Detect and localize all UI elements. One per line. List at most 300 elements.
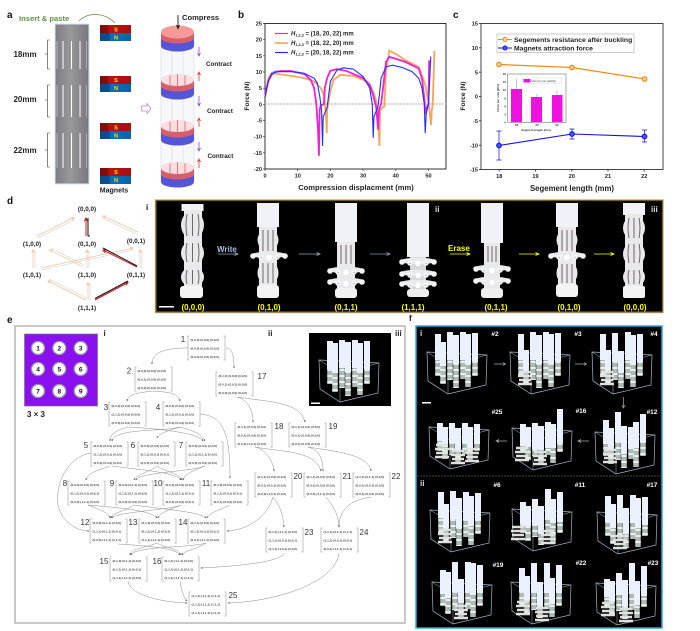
column state 0,0,0 erase xyxy=(623,203,645,298)
matrix 10: (0,0,0) (0,0,0) (0,0,0) xyxy=(166,483,194,487)
3 by 3 purple grid: 9 xyxy=(79,388,83,396)
photo iii tank xyxy=(309,333,391,406)
panel c: segment length chart xyxy=(453,10,663,193)
y axis title: Force (N) xyxy=(244,82,251,110)
sub-labels ii and iii: iii xyxy=(651,205,658,214)
matrix 7: (0,0,0) (0,0,0) (0,0,0) xyxy=(188,444,217,448)
matrix 8: 8 xyxy=(63,479,68,488)
matrix 3: (0,0,0) (0,0,0) (0,0,0) xyxy=(112,404,140,408)
contract arrows and labels xyxy=(198,47,234,168)
inset bar chart: Force per area (kPa) xyxy=(496,84,500,112)
matrix 2: (0,0,0) (0,0,0) (0,0,0) xyxy=(138,369,166,373)
matrix 18: (0,1,1) (0,0,0) (0,0,0) xyxy=(238,425,266,429)
compress label and arrow xyxy=(176,13,219,28)
blue curve xyxy=(265,57,431,146)
sub-labels ii and iii: ii xyxy=(435,205,439,214)
panel a: magnet assembly xyxy=(7,10,234,194)
arrow write step three xyxy=(370,252,390,256)
column state 0,1,0 xyxy=(250,203,288,298)
matrix 3: (1,1,1) (0,0,0) (0,0,0) xyxy=(112,412,140,416)
tank 19 xyxy=(432,562,504,624)
chart legend xyxy=(275,32,354,57)
matrix 7: (1,1,1) (0,1,1) (0,0,0) xyxy=(188,452,217,456)
matrix 4: 4 xyxy=(156,403,161,412)
matrix 24: (0,0,1) (1,1,1) (1,0,1) xyxy=(324,547,352,551)
matrix 5 xyxy=(84,441,128,466)
tank 16: #16 xyxy=(576,408,587,415)
matrix 16 xyxy=(153,557,199,581)
tank 11 xyxy=(511,482,586,551)
photo frame xyxy=(155,200,664,313)
3 by 3 purple grid xyxy=(24,334,98,406)
matrix 23: (0,1,1) (1,1,1) (0,0,0) xyxy=(268,530,297,534)
x tick labels: 0 xyxy=(263,174,267,180)
3 by 3 purple grid: 6 xyxy=(79,366,83,374)
plot frame and ticks xyxy=(479,24,663,172)
gray return arrows xyxy=(35,218,142,300)
magnets: S xyxy=(114,126,118,132)
matrix 21 xyxy=(304,472,352,497)
y axis title: Force (N) xyxy=(460,82,467,110)
matrix 3: (0,0,0) (0,0,0) (0,0,0) xyxy=(112,421,140,425)
matrix 11: (0,1,1) (0,0,1) (0,0,1) xyxy=(214,492,242,496)
chart legend: 1,2,3 xyxy=(295,53,304,57)
matrix 19 xyxy=(289,422,338,447)
matrix 22: (0,0,1) (0,0,1) (0,0,0) xyxy=(356,484,384,488)
matrix 11: 11 xyxy=(202,479,211,488)
matrix 9: 9 xyxy=(110,479,115,488)
3 by 3 purple grid: 1 xyxy=(36,346,40,352)
matrix 15 xyxy=(100,557,147,581)
matrix 22: (0,0,1) (0,0,0) (0,0,0) xyxy=(356,492,384,496)
y tick labels: 10 xyxy=(472,46,478,52)
panel label a: a xyxy=(7,10,13,21)
matrix 13: 13 xyxy=(129,518,138,527)
matrix 12 xyxy=(81,518,127,543)
sub-labels: i xyxy=(104,329,106,338)
chart legend: = (18, 22, 20) mm xyxy=(304,41,354,47)
matrix 18: 18 xyxy=(275,422,284,431)
y tick labels: 10 xyxy=(256,70,262,76)
tank 22: #22 xyxy=(576,560,587,567)
legend xyxy=(497,34,634,52)
frame xyxy=(416,326,662,628)
x tick labels: 50 xyxy=(425,174,432,180)
matrix 8: (0,0,0) (1,1,1) (0,0,0) xyxy=(70,500,99,504)
tank 2: #2 xyxy=(491,331,499,338)
3 by 3 purple grid: 5 xyxy=(57,366,61,374)
matrix 15: 15 xyxy=(100,557,109,566)
matrix 25: (1,1,1) (1,1,1) (1,1,1) xyxy=(192,602,220,606)
sub-labels ii and iii xyxy=(435,205,658,214)
tank 25: #25 xyxy=(492,409,503,416)
sub-labels: ii xyxy=(420,479,424,488)
matrix 22: 22 xyxy=(392,472,401,481)
sub-label i: i xyxy=(146,203,148,212)
matrix 10: 10 xyxy=(154,479,163,488)
arrow and label write: Write xyxy=(217,245,237,254)
chart legend: = (20, 18, 22) mm xyxy=(304,51,354,57)
matrix 25 xyxy=(189,591,238,616)
matrix 21: (0,0,1) (0,0,0) (0,0,0) xyxy=(306,484,335,488)
matrix 22 xyxy=(353,472,401,497)
matrix 17: (0,0,1) (0,0,1) (0,0,0) xyxy=(218,382,247,386)
panel f: photo sequences of tanks xyxy=(409,314,662,628)
matrix 4: (0,1,1) (0,0,1) (0,0,0) xyxy=(166,412,194,416)
matrix 10: (0,0,0) (0,0,0) (0,0,1) xyxy=(166,500,194,504)
segment length 20mm xyxy=(13,85,50,117)
inset bar chart: Memory bio stability xyxy=(532,79,557,83)
panel label b: b xyxy=(238,10,244,21)
x tick labels: 22 xyxy=(641,174,647,180)
matrix 16: (1,1,1) (1,1,1) (1,1,1) xyxy=(164,576,193,580)
flow arrows xyxy=(494,362,625,442)
matrix 15: (0,1,0) (0,1,1) (0,0,0) xyxy=(112,559,141,563)
matrix 20: (0,1,1) (0,0,0) (0,0,0) xyxy=(258,475,286,479)
y tick labels: -15 xyxy=(254,151,262,157)
matrix 17 xyxy=(216,372,267,396)
matrix 18: (0,0,1) (0,0,0) (0,0,0) xyxy=(238,434,266,438)
state labels: (1,1,0) xyxy=(78,272,96,279)
inset bar chart: 18 xyxy=(503,72,506,76)
matrix 9: (1,1,1) (0,1,1) (0,0,0) xyxy=(118,492,147,496)
matrix 14: 14 xyxy=(179,518,188,527)
legend: Magnets attraction force xyxy=(514,46,593,52)
state labels: (1,0,0) xyxy=(23,241,41,248)
contract arrows and labels: Contract xyxy=(208,153,234,160)
3 by 3 purple grid: 2 xyxy=(57,346,61,352)
matrix 14: (0,0,1) (1,1,1) (0,0,0) xyxy=(190,538,219,542)
matrix 5: (0,0,0) (0,0,0) (0,0,0) xyxy=(94,444,122,448)
matrix 17: (0,1,1) (0,0,0) (0,0,0) xyxy=(218,374,247,378)
y tick labels: -15 xyxy=(470,168,478,174)
state labels: (1,0,1) xyxy=(23,272,41,279)
strip state labels: (0,0,0) xyxy=(181,303,205,312)
x axis title: Segement length (mm) xyxy=(530,184,614,193)
matrix 7: 7 xyxy=(179,441,184,450)
matrix 24: (1,1,1) (0,0,1) (0,0,1) xyxy=(324,538,352,542)
insert and paste note xyxy=(19,14,115,23)
tank 2 xyxy=(427,331,499,394)
matrix 17: (0,0,0) (0,0,0) (0,0,0) xyxy=(218,391,247,395)
matrix 1: 1 xyxy=(181,335,186,344)
matrix 15: (1,1,1) (1,1,1) (0,0,0) xyxy=(112,576,141,580)
segment length 18mm xyxy=(13,40,50,69)
matrix 6: (0,0,0) (0,0,0) (0,0,0) xyxy=(140,444,169,448)
inset bar chart: 22 xyxy=(555,123,559,127)
slotted column xyxy=(55,24,89,184)
legend: Segements resistance after buckling xyxy=(514,37,632,44)
tank 3: #3 xyxy=(574,331,582,338)
matrix 1: (0,0,0) (0,0,0) (0,0,0) xyxy=(190,346,219,350)
segment length 22mm xyxy=(13,133,50,167)
x tick labels: 18 xyxy=(496,174,502,180)
strip state labels: (0,1,1) xyxy=(484,303,508,312)
strip state labels: (1,1,1) xyxy=(401,303,425,312)
matrix 23: 23 xyxy=(305,528,314,537)
panel label e: e xyxy=(7,315,13,326)
y tick labels: 15 xyxy=(472,22,478,28)
matrix 8 xyxy=(63,479,105,505)
compress label and arrow: Compress xyxy=(182,13,219,22)
y tick labels: -20 xyxy=(254,167,262,173)
tank 12: #12 xyxy=(647,409,658,416)
matrix 24: (1,1,1) (0,1,1) (1,1,1) xyxy=(324,530,352,534)
panel label f: f xyxy=(409,314,412,323)
orange curve xyxy=(265,51,434,146)
x tick labels: 30 xyxy=(360,174,366,180)
sub-labels: iii xyxy=(395,329,402,338)
divider between i and ii xyxy=(417,475,661,477)
matrix 7: (0,0,0) (0,0,0) (0,0,0) xyxy=(188,461,217,465)
matrix 15: (0,1,1) (0,1,1) (0,0,1) xyxy=(112,568,141,572)
matrix 21: 21 xyxy=(343,472,352,481)
contract arrows and labels: Contract xyxy=(206,61,233,68)
tank 16 xyxy=(512,408,587,470)
y tick labels: -5 xyxy=(473,119,478,125)
tank 23 xyxy=(596,560,659,625)
magnets: N xyxy=(114,178,118,184)
matrix 7 xyxy=(179,441,223,466)
y tick labels: -10 xyxy=(470,143,478,149)
arrow erase step two xyxy=(519,252,539,256)
plot frame and ticks xyxy=(263,24,446,171)
matrix 12: (0,0,0) (0,1,1) (0,0,0) xyxy=(92,521,121,525)
matrix 25: (1,1,1) (1,1,1) (1,1,1) xyxy=(192,611,220,615)
matrix 13: (0,1,0) (0,0,0) (0,0,0) xyxy=(142,521,170,525)
inset bar chart: 0 xyxy=(504,120,506,124)
chart legend: = (18, 20, 22) mm xyxy=(304,32,354,38)
inset bar chart: 6 xyxy=(504,104,506,108)
matrix 25: 25 xyxy=(229,591,238,600)
highlighted write and erase arrows xyxy=(86,218,137,300)
insert and paste note: Insert & paste xyxy=(19,14,69,23)
matrix 17: 17 xyxy=(258,372,267,381)
tank 3 xyxy=(510,331,582,394)
magenta curve xyxy=(265,57,429,156)
tank 4: #4 xyxy=(650,331,658,338)
inset bar chart: 18 xyxy=(515,123,518,127)
matrix 4: (0,0,0) (0,0,0) (0,0,0) xyxy=(166,404,194,408)
segment length 18mm: 18mm xyxy=(13,50,37,59)
strip state labels: (0,1,1) xyxy=(334,303,358,312)
y tick labels: 0 xyxy=(475,95,478,101)
matrix 12: (1,1,1) (0,1,1) (0,0,1) xyxy=(92,530,121,534)
matrix 9: (0,0,0) (0,1,1) (0,0,0) xyxy=(118,483,147,487)
matrix 20 xyxy=(255,472,303,497)
arrow erase step three xyxy=(594,252,614,256)
x tick labels: 20 xyxy=(569,174,575,180)
tank 17: #17 xyxy=(647,482,658,489)
tank 17 xyxy=(597,482,658,554)
state labels: (1,1,1) xyxy=(78,305,96,312)
tank 23: #23 xyxy=(648,560,659,567)
3 by 3 purple grid: 8 xyxy=(57,388,61,396)
strip state labels: (0,0,0) xyxy=(623,303,647,312)
panel b: force displacement chart xyxy=(238,10,446,192)
sub-labels: i xyxy=(420,329,422,338)
matrix 23: (1,1,1) (1,0,1) (0,0,0) xyxy=(268,547,297,551)
matrix 14: (0,1,1) (0,0,0) (0,0,0) xyxy=(190,521,219,525)
matrix 2: (0,0,1) (0,0,0) (0,0,0) xyxy=(138,378,166,382)
chart legend: 1,2,3 xyxy=(295,43,304,47)
matrix 9 xyxy=(110,479,153,505)
tank 6 xyxy=(430,482,501,552)
y tick labels: -10 xyxy=(254,135,262,141)
matrix 1: (0,0,0) (0,0,0) (0,0,0) xyxy=(190,355,219,359)
x tick labels xyxy=(263,174,432,180)
inset bar chart: 12 xyxy=(503,88,506,92)
column state 0,1,1 erase xyxy=(473,203,511,298)
scale bar xyxy=(159,306,174,308)
chart legend: H xyxy=(291,32,296,38)
segment length 20mm: 20mm xyxy=(13,95,37,104)
matrix 5: 5 xyxy=(84,441,89,450)
magnets xyxy=(100,25,131,184)
y tick labels xyxy=(254,22,262,173)
matrix 21: (0,1,1) (0,0,0) (0,0,0) xyxy=(306,475,335,479)
segment length 22mm: 22mm xyxy=(13,146,37,155)
matrix 1 xyxy=(181,335,225,360)
panel label c: c xyxy=(453,10,459,21)
y tick labels: 5 xyxy=(259,86,262,92)
matrix 2 xyxy=(127,366,172,391)
state labels: (0,1,0) xyxy=(78,241,96,248)
inset bar chart: 15 xyxy=(503,80,506,84)
matrix 10 xyxy=(154,479,200,505)
sub-labels xyxy=(420,329,424,488)
panel d: state graph xyxy=(7,196,145,312)
matrix 6: (0,0,0) (0,0,0) (0,0,0) xyxy=(140,461,169,465)
tank 11: #11 xyxy=(575,482,586,489)
x tick labels: 10 xyxy=(295,174,301,180)
3 by 3 purple grid: 4 xyxy=(36,366,40,374)
matrix 13: (1,1,1) (1,1,1) (0,0,0) xyxy=(142,538,170,542)
matrix 13 xyxy=(129,518,176,543)
matrix 11: (0,1,0) (0,0,0) (0,0,0) xyxy=(214,483,242,487)
matrix 10: (1,1,1) (0,1,1) (0,0,1) xyxy=(166,492,194,496)
matrix 4: (0,0,0) (0,0,0) (0,0,0) xyxy=(166,421,194,425)
transition arrow xyxy=(142,104,151,114)
sub-labels xyxy=(104,329,402,338)
inset bar chart: Segment length (mm) xyxy=(521,128,551,132)
column state 0,0,0 xyxy=(180,204,204,298)
matrix 2: 2 xyxy=(127,366,132,376)
column state 0,1,0 erase xyxy=(548,203,586,297)
3 by 3 purple grid: 3 xyxy=(79,346,83,352)
matrix 12: (0,0,0) (1,1,1) (1,1,1) xyxy=(92,538,121,542)
y tick labels xyxy=(470,22,478,174)
matrix 4 xyxy=(156,402,200,426)
y tick labels: 20 xyxy=(256,38,262,44)
matrix 6 xyxy=(131,441,175,466)
y tick labels: 0 xyxy=(259,102,262,108)
tank 6: #6 xyxy=(493,482,501,489)
magnets label: Magnets xyxy=(100,188,128,194)
matrix 18 xyxy=(235,422,284,447)
chart legend: H xyxy=(291,51,296,57)
transition edges xyxy=(58,348,371,603)
matrix 1: (0,0,0) (0,0,0) (0,0,0) xyxy=(190,338,219,342)
inset bar chart: 9 xyxy=(504,96,506,100)
matrix 25: (1,1,1) (1,1,1) (1,1,1) xyxy=(192,594,220,598)
matrix 12: 12 xyxy=(81,518,90,527)
column state 0,1,1 xyxy=(327,203,365,298)
matrix 11: (0,0,1) (0,0,0) (0,0,0) xyxy=(214,500,242,504)
matrix 2: (0,0,0) (0,0,0) (0,0,0) xyxy=(138,386,166,390)
matrix 19: (0,0,1) (0,0,0) (0,0,0) xyxy=(292,434,320,438)
chart legend: H xyxy=(291,41,296,47)
matrix 6: 6 xyxy=(131,441,136,450)
matrix 20: (0,0,0) (1,0,1) (0,0,0) xyxy=(258,492,286,496)
arrow and label erase: Erase xyxy=(448,244,470,253)
magnets: S xyxy=(114,170,118,176)
matrix 24: 24 xyxy=(360,528,369,537)
scale bar xyxy=(422,402,431,404)
matrix 6: (0,1,1) (0,0,1) (0,0,1) xyxy=(140,452,169,456)
matrix 24 xyxy=(321,528,369,552)
matrix 5: (0,0,0) (0,0,0) (0,0,0) xyxy=(94,461,122,465)
3 by 3 purple grid: 7 xyxy=(36,388,40,396)
grid size label: 3 × 3 xyxy=(27,410,46,419)
peach transition arrows xyxy=(33,216,140,300)
tank 19: #19 xyxy=(493,562,504,569)
tank 12 xyxy=(595,409,658,474)
state labels: (0,0,1) xyxy=(127,238,145,245)
inset bar chart xyxy=(496,72,566,132)
state labels xyxy=(23,206,145,312)
y tick labels: 5 xyxy=(475,70,478,76)
column state 1,1,1 xyxy=(399,203,437,297)
x tick labels: 40 xyxy=(393,174,399,180)
panel d-i: write and erase photo strip xyxy=(146,200,664,313)
blue series xyxy=(496,129,647,160)
matrix 9: (0,0,0) (0,0,0) (0,0,0) xyxy=(118,500,147,504)
x axis title: Compression displacment (mm) xyxy=(298,183,414,192)
matrix 16: (0,1,1) (1,1,1) (0,0,0) xyxy=(164,559,193,563)
x tick labels: 20 xyxy=(327,174,334,180)
matrix 23 xyxy=(266,528,314,552)
matrix 19: (0,0,1) (0,0,0) (0,0,0) xyxy=(292,442,320,446)
panel e: state transition tree xyxy=(7,315,405,623)
matrix 19: (0,1,1) (0,0,0) (0,0,0) xyxy=(292,425,320,429)
orange series xyxy=(497,62,647,81)
tank 25 xyxy=(429,409,503,469)
magnets: S xyxy=(114,78,118,84)
matrix 21: (0,0,0) (1,1,1) (0,0,0) xyxy=(306,492,335,496)
matrix 22: (1,1,1) (0,1,1) (0,0,0) xyxy=(356,475,384,479)
matrix 16: 16 xyxy=(153,557,162,566)
matrix 3 xyxy=(104,402,146,426)
inset bar chart: 3 xyxy=(504,112,506,116)
state labels: (0,0,0) xyxy=(78,206,96,213)
matrix 14: (0,1,1) (0,0,1) (0,0,1) xyxy=(190,530,219,534)
magnets: N xyxy=(114,86,118,92)
matrix 11 xyxy=(202,479,248,505)
tank 22 xyxy=(511,560,587,624)
magnets: S xyxy=(114,28,118,34)
matrix 8: (0,0,0) (0,0,0) (0,0,0) xyxy=(70,483,99,487)
strip state labels xyxy=(181,303,647,312)
y tick labels: -5 xyxy=(257,118,262,124)
arrow write step two xyxy=(299,252,320,256)
matrix 19: 19 xyxy=(329,422,338,431)
matrix 5: (1,1,1) (0,0,1) (0,0,0) xyxy=(94,452,122,456)
matrix 3: 3 xyxy=(104,403,109,412)
y tick labels: 25 xyxy=(256,22,262,28)
panel label d: d xyxy=(7,196,13,207)
sub-labels: ii xyxy=(268,329,272,338)
